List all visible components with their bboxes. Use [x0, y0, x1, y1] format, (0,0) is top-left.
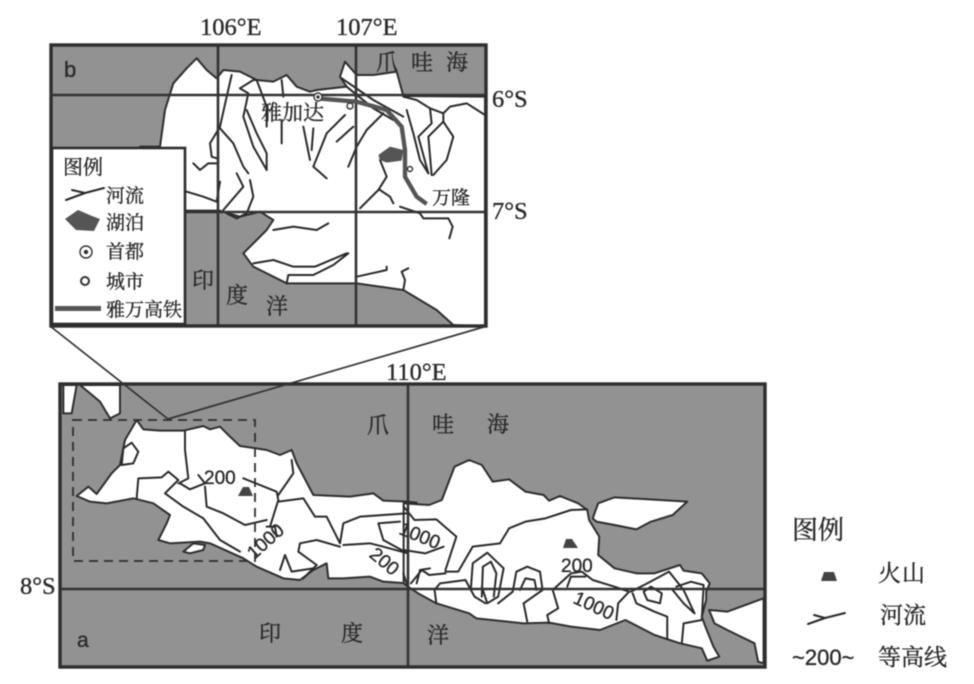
- city marker: Bekasi area: [347, 103, 353, 109]
- railway: Jakarta-Bandung high-speed rail: [317, 98, 427, 204]
- dashed box: area of map b: [73, 420, 255, 561]
- label: 度: 度: [341, 621, 363, 646]
- legend text: railway: 雅万高铁: [106, 299, 182, 321]
- icon: capital: [80, 246, 92, 258]
- label: 6°S: 6°S: [492, 86, 528, 113]
- label: 雅加达: 雅加达: [261, 101, 324, 125]
- legend text: river: 河流: [106, 185, 144, 207]
- label: 印: 印: [192, 268, 214, 293]
- land: east Java and islands: [404, 460, 764, 663]
- contour label: 1000: 1000: [396, 519, 443, 554]
- panel: map b legend: [52, 148, 185, 324]
- contour label: 1000: 1000: [243, 520, 289, 564]
- land: west Java detail: [140, 58, 485, 327]
- contour label: 1000: 1000: [570, 588, 617, 625]
- label: 爪哇海 map b: 爪哇海: [376, 50, 481, 75]
- label: 印: 印: [259, 621, 281, 646]
- label: b: b: [64, 57, 76, 82]
- rivers of map b: [187, 75, 485, 290]
- frame of map a: [60, 384, 765, 667]
- icon: river: [66, 188, 104, 200]
- contour label: 200: 200: [365, 544, 403, 580]
- label: 度: 度: [226, 283, 248, 308]
- connector: right zoom line: [168, 326, 487, 419]
- icon: railway: [55, 306, 101, 311]
- label: 7°S: 7°S: [492, 198, 528, 225]
- legend text: lake: 湖泊: [106, 212, 144, 234]
- legend text: river: 河流: [880, 603, 926, 628]
- label: a: a: [77, 629, 89, 652]
- city marker: Jakarta capital: [314, 93, 322, 101]
- legend title: 图例: [63, 156, 103, 179]
- contours and rivers: east: [404, 507, 704, 643]
- label: 洋: 洋: [266, 294, 288, 319]
- icon: contour sample: ~200~: [792, 645, 854, 670]
- land: west Java: [63, 385, 417, 585]
- panel: map a Java island: [60, 384, 765, 667]
- grid lines of map b: [50, 44, 487, 326]
- icon: city: [81, 277, 89, 285]
- contour label: 200: 200: [204, 468, 236, 489]
- label: 106°E: 106°E: [200, 14, 262, 41]
- legend title: 图例: [792, 516, 844, 545]
- icon: lake: [65, 210, 100, 231]
- label: 海: 海: [487, 412, 509, 437]
- city marker: Bandung: [408, 166, 412, 172]
- icon: volcano west: [238, 487, 253, 496]
- legend text: volcano: 火山: [878, 561, 926, 586]
- grid lines of map a: [60, 384, 765, 667]
- frame of map b: [51, 45, 486, 326]
- contours and rivers: west: [122, 432, 430, 587]
- label: 爪: 爪: [367, 413, 389, 438]
- legend text: city: 城市: [106, 271, 144, 293]
- label: 哇: 哇: [432, 412, 454, 437]
- panel: map b Jakarta-Bandung detail: [50, 44, 487, 327]
- lake: [378, 147, 403, 163]
- icon: volcano: [821, 572, 837, 581]
- label: 107°E: 107°E: [336, 14, 398, 41]
- label: 万隆: 万隆: [432, 187, 470, 209]
- legend text: contour: 等高线: [878, 645, 947, 670]
- icon: river: [808, 613, 845, 624]
- label: 洋: 洋: [427, 623, 449, 648]
- label: 110°E: 110°E: [386, 359, 447, 386]
- label: 8°S: 8°S: [20, 573, 56, 600]
- contour label: 200: 200: [561, 556, 593, 577]
- legend of map a: [792, 516, 947, 670]
- legend text: capital: 首都: [106, 241, 144, 263]
- connector: left zoom line: [50, 326, 168, 419]
- icon: volcano east: [563, 539, 578, 548]
